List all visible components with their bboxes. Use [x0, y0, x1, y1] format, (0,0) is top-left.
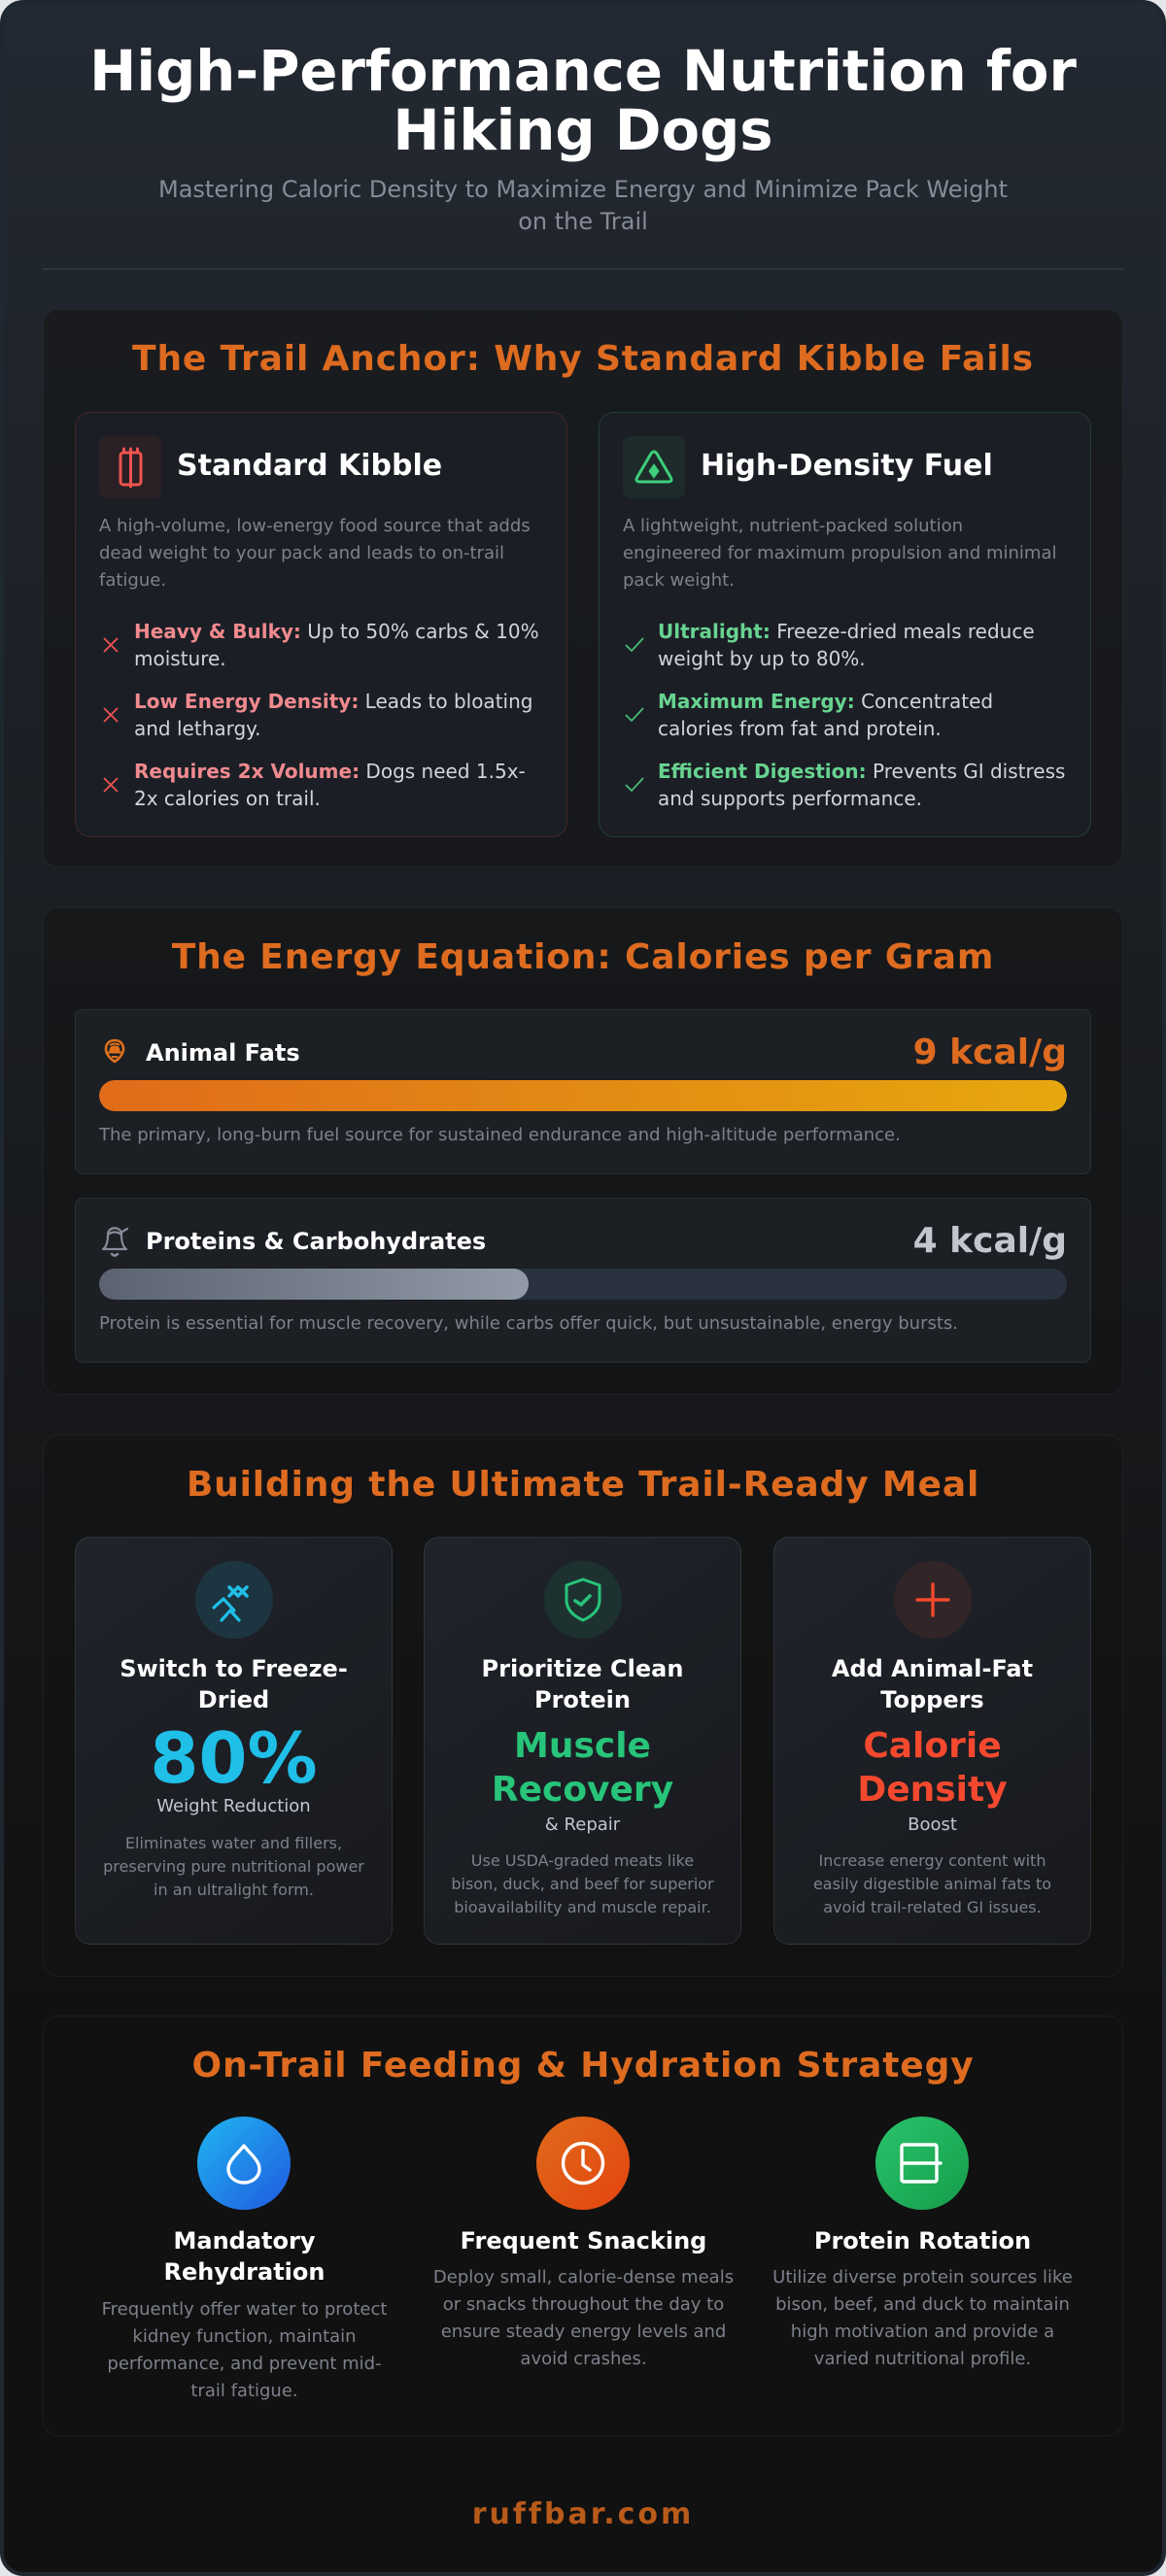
- footer: website: ruffbar.com: [472, 2497, 694, 2531]
- list item: efficient digestion: [625, 760, 1065, 810]
- description: Increase energy content with: [819, 1851, 1046, 1870]
- list item: ultralight: [625, 620, 1035, 670]
- description: in an ultralight form.: [154, 1881, 314, 1899]
- list item: low energy density: and lethargy.: [134, 717, 261, 740]
- description: Eliminates water and fillers,: [125, 1834, 342, 1852]
- description: avoid crashes.: [520, 2349, 647, 2369]
- stat: muscle recovery: Recovery: [492, 1770, 673, 1809]
- list item: requires 2x volume: 2x calories on trail.: [134, 787, 321, 810]
- list item: ultralight: weight by up to 80%.: [658, 647, 866, 670]
- panel: energy equation: [43, 907, 1123, 1395]
- bar: animal fats: [99, 1080, 1067, 1111]
- column: frequent snacking: [433, 2117, 734, 2369]
- list item: maximum energy: calories from fat and protein.: [658, 717, 942, 740]
- description: [813, 1851, 1051, 1916]
- value: 4 kcal/g: 4 kcal/g: [913, 1221, 1067, 1261]
- list item: heavy and bulky: Heavy & Bulky: Up to 50% carbs & 10%: [134, 620, 539, 643]
- stat label: Weight Reduction: [156, 1796, 311, 1816]
- icon: split box: [875, 2117, 969, 2210]
- heading: trail anchor: The Trail Anchor: Why Standard Kibble Fails: [132, 339, 1034, 379]
- list item: requires 2x volume: Requires 2x Volume: Dogs need 1.5x-: [134, 760, 526, 783]
- list item: efficient digestion: Efficient Digestion: Prevents GI distress: [658, 760, 1065, 783]
- card: freeze-dried: [75, 1537, 393, 1945]
- list item: low energy density: [103, 690, 532, 740]
- card: standard kibble: [75, 412, 567, 837]
- list item: low energy density: Low Energy Density: Leads to bloating: [134, 690, 532, 713]
- description: [99, 516, 531, 591]
- card: high-density fuel: [599, 412, 1091, 837]
- heading: Dried: [198, 1686, 269, 1713]
- label: proteins and carbohydrates: Proteins & Carbohydrates: [146, 1228, 486, 1255]
- subtitle: on the Trail: [518, 208, 648, 235]
- description: high motivation and provide a: [791, 2322, 1054, 2342]
- list item: heavy and bulky: [103, 620, 539, 670]
- description: A lightweight, nutrient-packed solution: [623, 516, 963, 536]
- icon: water drop: [197, 2117, 291, 2210]
- description: kidney function, maintain: [132, 2326, 357, 2347]
- list item: heavy and bulky: moisture.: [134, 647, 226, 670]
- list item: maximum energy: [625, 690, 993, 740]
- icon: clock: [536, 2117, 630, 2210]
- list item: ultralight: Ultralight: Freeze-dried meals reduce: [658, 620, 1035, 643]
- description: Use USDA-graded meats like: [471, 1851, 694, 1870]
- column: mandatory rehydration: [102, 2117, 387, 2401]
- heading: Rehydration: [163, 2258, 325, 2286]
- heading: building the meal: Building the Ultimate Trail-Ready Meal: [187, 1465, 979, 1505]
- title: Hiking Dogs: [393, 98, 773, 163]
- description: avoid trail-related GI issues.: [823, 1898, 1042, 1916]
- description: A high-volume, low-energy food source that adds: [99, 516, 531, 536]
- heading: energy equation: The Energy Equation: Calories per Gram: [172, 937, 994, 977]
- stat: calorie density: Density: [857, 1770, 1008, 1809]
- title: High-Performance Nutrition for: [89, 39, 1077, 104]
- heading: Mandatory: [173, 2227, 315, 2254]
- list item: efficient digestion: and supports performance.: [658, 787, 922, 810]
- icon: bell: [101, 1227, 128, 1257]
- description: bioavailability and muscle repair.: [454, 1898, 711, 1916]
- description: pack weight.: [623, 570, 735, 591]
- description: performance, and prevent mid-: [107, 2354, 382, 2374]
- description: [623, 516, 1056, 591]
- heading: [120, 1655, 348, 1713]
- heading: Add Animal-Fat: [832, 1655, 1033, 1682]
- card: clean protein: [424, 1537, 741, 1945]
- heading: standard kibble: Standard Kibble: [177, 449, 442, 483]
- description: Utilize diverse protein sources like: [772, 2267, 1073, 2288]
- card: animal-fat toppers: [773, 1537, 1091, 1945]
- energy row: animal fats: [75, 1009, 1091, 1174]
- description: or snacks throughout the day to: [443, 2294, 724, 2315]
- stat: muscle recovery: [492, 1725, 673, 1809]
- bar: proteins and carbohydrates: [99, 1269, 1067, 1300]
- description: fatigue.: [99, 570, 166, 591]
- icon: fat drop: [105, 1039, 124, 1063]
- heading: Protein: [534, 1686, 631, 1713]
- title: [89, 39, 1077, 163]
- heading: [482, 1655, 683, 1713]
- value: 9 kcal/g: 9 kcal/g: [913, 1033, 1067, 1072]
- label: animal fats: Animal Fats: [146, 1039, 300, 1067]
- description: preserving pure nutritional power: [103, 1857, 364, 1876]
- description: The primary, long-burn fuel source for sustained endurance and high-altitude performance.: [99, 1125, 901, 1145]
- description: [102, 2299, 387, 2401]
- description: [772, 2267, 1073, 2369]
- stat: calorie density: [857, 1725, 1008, 1809]
- list item: requires 2x volume: [103, 760, 526, 810]
- description: [451, 1851, 714, 1916]
- heading: Switch to Freeze-: [120, 1655, 348, 1682]
- description: [103, 1834, 364, 1899]
- stat: calorie density: Calorie: [863, 1725, 1002, 1766]
- icon: freeze snow: [195, 1561, 273, 1639]
- heading: Protein Rotation: [814, 2227, 1031, 2254]
- description: Protein is essential for muscle recovery, while carbs offer quick, but unsustainable, energy bursts.: [99, 1313, 958, 1334]
- stat label: Boost: [908, 1814, 957, 1835]
- icon: kibble bag: [99, 436, 161, 498]
- subtitle: Mastering Caloric Density to Maximize Energy and Minimize Pack Weight: [158, 176, 1008, 203]
- description: [433, 2267, 734, 2369]
- icon: plus: [894, 1561, 972, 1639]
- panel: trail anchor: [43, 309, 1123, 867]
- energy row: proteins and carbohydrates: [75, 1198, 1091, 1363]
- heading: [163, 2227, 325, 2286]
- description: Frequently offer water to protect: [102, 2299, 387, 2320]
- subtitle: [158, 176, 1008, 235]
- description: easily digestible animal fats to: [813, 1875, 1051, 1893]
- description: varied nutritional profile.: [814, 2349, 1031, 2369]
- heading: Prioritize Clean: [482, 1655, 683, 1682]
- description: trail fatigue.: [190, 2381, 298, 2401]
- stat label: & Repair: [545, 1814, 620, 1835]
- panel: feeding and hydration: [43, 2016, 1123, 2436]
- description: ensure steady energy levels and: [441, 2322, 726, 2342]
- panel: building the meal: [43, 1435, 1123, 1977]
- description: Deploy small, calorie-dense meals: [433, 2267, 734, 2288]
- heading: Frequent Snacking: [461, 2227, 706, 2254]
- heading: high-density fuel: High-Density Fuel: [701, 449, 993, 483]
- description: dead weight to your pack and leads to on-trail: [99, 543, 504, 563]
- heading: Toppers: [880, 1686, 984, 1713]
- icon: fuel triangle: [623, 436, 685, 498]
- heading: feeding and hydration: On-Trail Feeding & Hydration Strategy: [191, 2046, 975, 2085]
- column: protein rotation: [772, 2117, 1073, 2369]
- heading: [832, 1655, 1033, 1713]
- icon: shield check: [544, 1561, 622, 1639]
- description: bison, beef, and duck to maintain: [775, 2294, 1070, 2315]
- description: engineered for maximum propulsion and minimal: [623, 543, 1056, 563]
- stat: muscle recovery: Muscle: [514, 1725, 651, 1766]
- description: bison, duck, and beef for superior: [451, 1875, 714, 1893]
- list item: maximum energy: Maximum Energy: Concentrated: [658, 690, 993, 713]
- stat: 80%: 80%: [150, 1717, 318, 1799]
